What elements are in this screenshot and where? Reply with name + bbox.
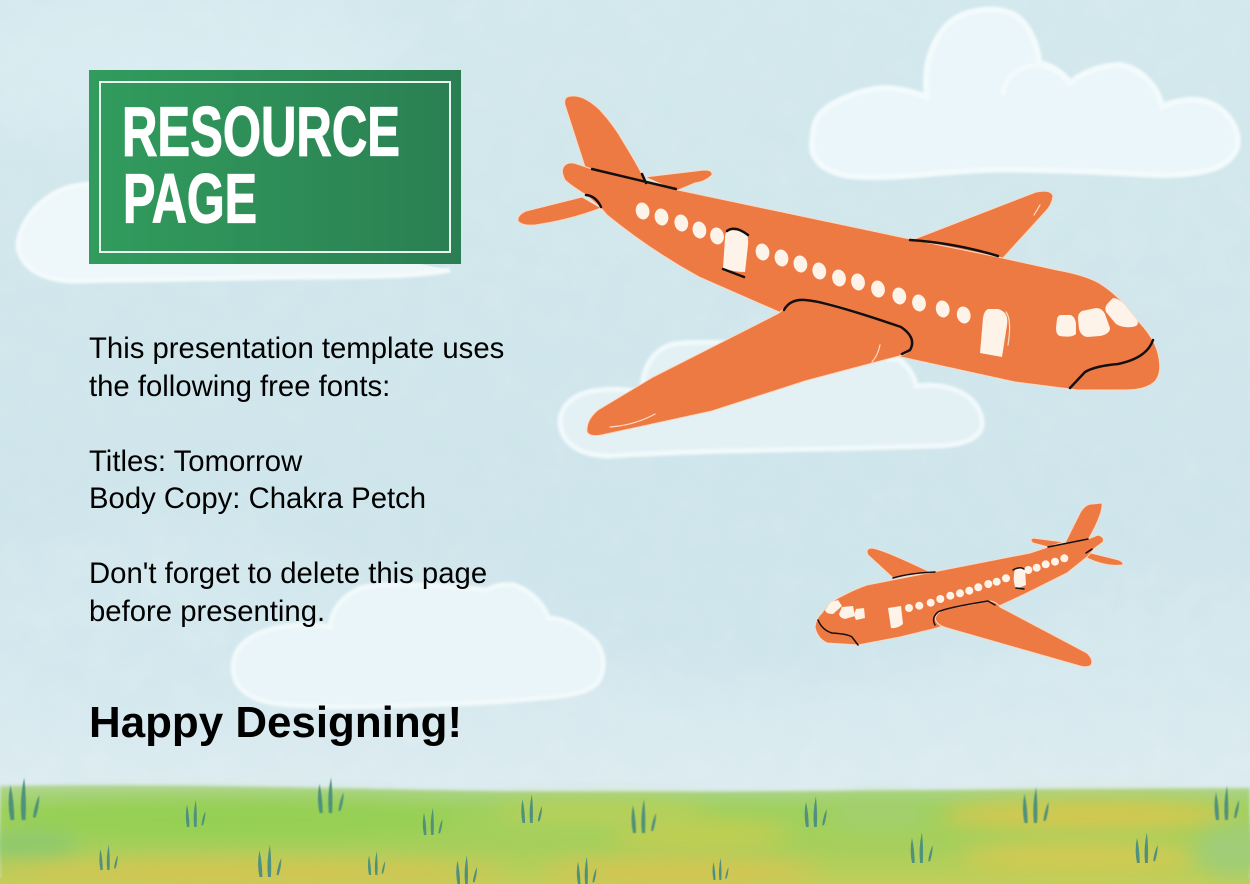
- cloud: bottom left: [233, 585, 603, 707]
- title banner: [89, 70, 461, 264]
- cloud: left behind title: [18, 184, 450, 281]
- title text: RESOURCE: [122, 92, 400, 170]
- body text: Titles: Tomorrow: [89, 445, 303, 478]
- black panel lines: [818, 539, 1092, 645]
- fuselage: [815, 535, 1103, 645]
- title text: PAGE: [123, 160, 257, 238]
- grass field: [0, 785, 1250, 884]
- doors: [723, 230, 1007, 357]
- lower wing: [587, 300, 912, 436]
- lower wing: [935, 601, 1092, 667]
- body text: before presenting.: [89, 595, 325, 628]
- grass tufts: [9, 777, 1239, 884]
- doors: [888, 568, 1026, 628]
- upper wing: [867, 548, 930, 578]
- body text: Body Copy: Chakra Petch: [89, 482, 426, 515]
- cockpit windows: [1056, 298, 1138, 337]
- tail fin and stabilizers: [518, 96, 712, 225]
- cloud: under large plane: [560, 342, 982, 456]
- large orange airplane: [518, 96, 1160, 436]
- black panel lines: [586, 169, 1153, 388]
- upper wing: [912, 191, 1053, 258]
- cloud: top right: [812, 10, 1238, 177]
- body text: the following free fonts:: [89, 370, 390, 403]
- passenger windows: [905, 554, 1068, 612]
- passenger windows: [634, 201, 972, 325]
- closing line: Happy Designing!: [89, 698, 462, 747]
- small orange airplane: [815, 503, 1123, 667]
- cockpit windows: [825, 600, 865, 620]
- fuselage: [562, 163, 1160, 390]
- tail fin and stabilizers: [1031, 503, 1123, 565]
- body text: This presentation template uses: [89, 332, 504, 365]
- cream highlights: [610, 205, 1040, 427]
- body text: Don't forget to delete this page: [89, 557, 487, 590]
